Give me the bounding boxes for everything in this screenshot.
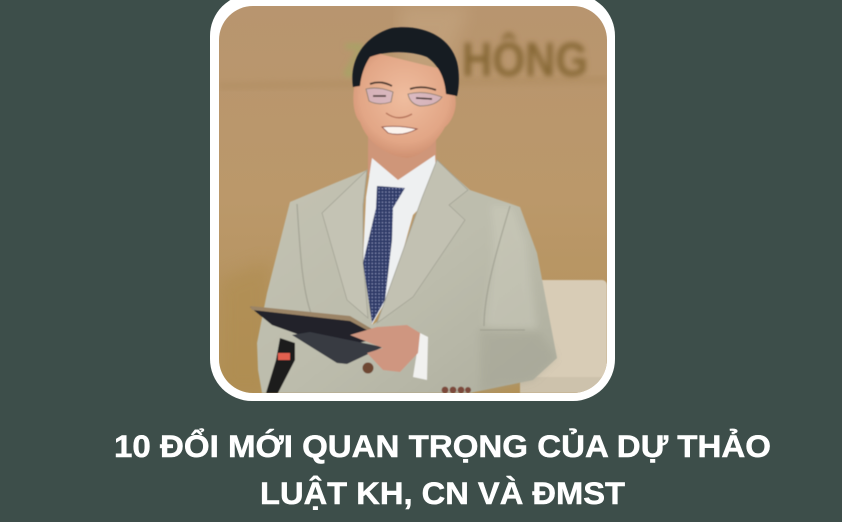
- cuff: [413, 333, 428, 380]
- face: [353, 52, 456, 158]
- blurred wall lettering: [344, 30, 588, 79]
- portrait photo: [219, 6, 607, 393]
- shirt: [363, 155, 437, 325]
- blurred wall lettering: HÔNG: [462, 32, 588, 87]
- title line 1: 10 ĐỔI MỚI QUAN TRỌNG CỦA DỰ THẢO: [114, 428, 771, 464]
- left lapel: [322, 170, 368, 318]
- mic: [266, 338, 295, 393]
- right lapel: [377, 160, 468, 323]
- title line 2: LUẬT KH, CN VÀ ĐMST: [260, 475, 625, 511]
- photo wall backdrop: [219, 6, 607, 393]
- jacket button: [362, 362, 374, 374]
- blurred wall lettering: Z: [343, 35, 365, 88]
- hand: [350, 325, 420, 372]
- neck: [368, 138, 436, 180]
- glasses: [366, 88, 442, 106]
- jacket shading: [488, 212, 534, 328]
- hair: [352, 27, 459, 96]
- tie: [363, 186, 405, 323]
- title: [114, 428, 771, 511]
- nose and smile: [386, 113, 412, 118]
- photo frame: [210, 0, 615, 401]
- man: [250, 27, 557, 393]
- sleeve buttons: [442, 387, 471, 393]
- tablet: [254, 310, 367, 344]
- sofa: [520, 280, 607, 393]
- eyes and brows: [370, 82, 436, 90]
- jacket: [257, 160, 557, 393]
- infographic canvas: [116, 0, 770, 510]
